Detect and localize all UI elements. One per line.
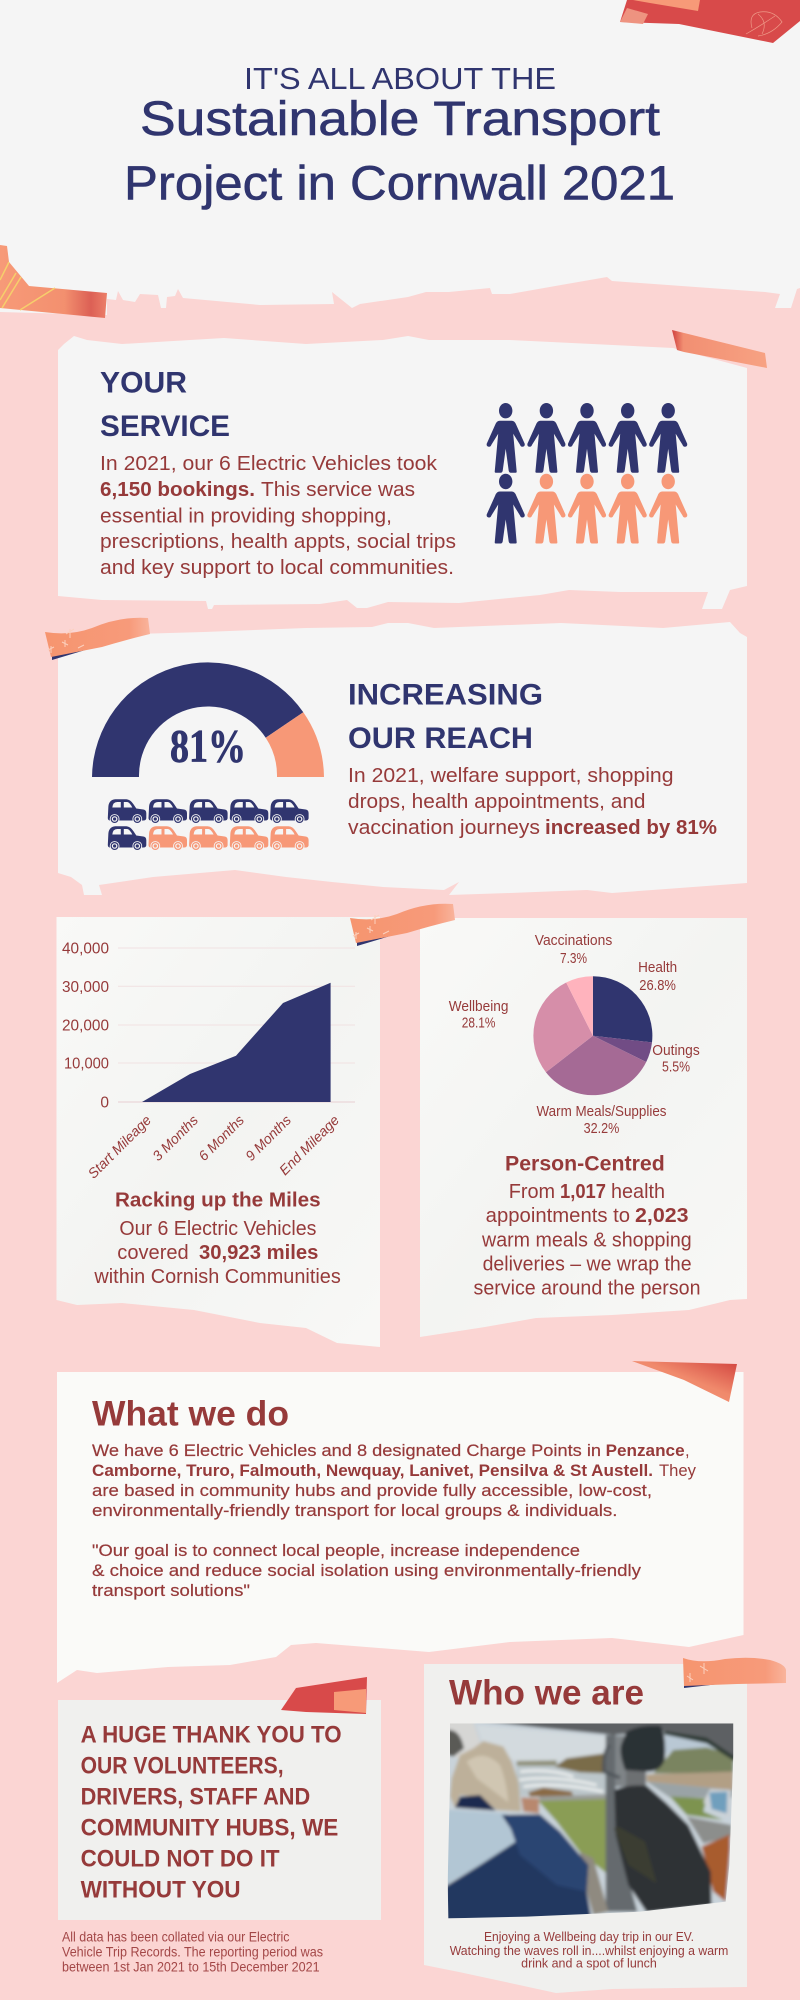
text block: bookings [100, 453, 456, 579]
text block: thank you message: A HUGE THANK YOU TO [81, 1722, 342, 1749]
icon: ten people pictogram [487, 403, 687, 544]
text block: bookings: In 2021, our 6 Electric Vehicles took [100, 453, 438, 475]
caption: photo: drink and a spot of lunch [521, 1956, 657, 1971]
text block: reach: In 2021, welfare support, shopping [348, 765, 674, 787]
text block: miles: covered [117, 1242, 189, 1264]
heading: your service: YOUR [100, 366, 187, 400]
heading: what we do: What we do [92, 1395, 289, 1434]
y axis labels: 30,000 [62, 979, 109, 996]
text block: thank you message: OUR VOLUNTEERS, [81, 1752, 284, 1779]
x axis labels: 9 Months [242, 1112, 294, 1164]
panel: who we are [424, 1664, 747, 1993]
panel: racking up the miles [56, 917, 380, 1347]
pie labels [449, 932, 700, 1137]
text block: charge points: Penzance [606, 1442, 685, 1460]
text block: person-centred: health [611, 1181, 665, 1203]
x axis labels: End Mileage [276, 1112, 342, 1178]
panel: what we do [57, 1372, 744, 1683]
pie labels: Wellbeing [449, 998, 508, 1015]
pie labels: 7.3% [560, 950, 587, 967]
title: eyebrow: IT'S ALL ABOUT THE [244, 61, 556, 96]
y axis labels: 40,000 [62, 940, 109, 958]
text block: thank you message [81, 1722, 342, 1903]
text block: charge points: environmentally-friendly transport for local groups & individuals. [92, 1502, 618, 1520]
caption: photo: Enjoying a Wellbeing day trip in our EV. [484, 1929, 694, 1944]
x axis labels [84, 1112, 342, 1181]
title: main line one: Sustainable Transport [140, 93, 660, 146]
area series [142, 983, 331, 1102]
text block: person-centred: service around the person [474, 1278, 700, 1300]
text block: reach [348, 765, 717, 839]
chart: journey purpose pie [449, 932, 700, 1137]
text block: bookings: and key support to local communities. [100, 557, 454, 579]
text block: reach: vaccination journeys [348, 817, 540, 839]
text block: bookings: 6,150 bookings. [100, 479, 255, 501]
panel: header [0, 0, 800, 315]
text block: person-centred: 2,023 [635, 1205, 689, 1227]
text block: thank you message: DRIVERS, STAFF AND [81, 1784, 310, 1811]
pie labels: 5.5% [662, 1059, 690, 1076]
text block: data note: Vehicle Trip Records. The reporting period was [62, 1944, 323, 1960]
caption: photo [450, 1929, 728, 1971]
text block: charge points [92, 1442, 697, 1520]
text block: bookings: This service was [261, 479, 415, 501]
text block: thank you message: COULD NOT DO IT [81, 1846, 280, 1873]
heading: your service [100, 366, 230, 443]
y axis labels: 10,000 [64, 1056, 109, 1072]
title: main line two: Project in Cornwall 2021 [124, 158, 675, 211]
text block: miles [93, 1218, 341, 1288]
tape: left orange [0, 245, 107, 318]
text block: charge points: are based in community hubs and provide fully accessible, low-cost, [92, 1482, 652, 1500]
panel: person-centred [420, 918, 747, 1337]
x axis labels: Start Mileage [84, 1112, 154, 1181]
tape: top right red [620, 0, 800, 43]
text block: goal quote: "Our goal is to connect local people, increase independence [92, 1542, 580, 1560]
text block: person-centred: appointments to [486, 1205, 630, 1227]
text block: charge points: , [685, 1442, 690, 1460]
gauge value: 81% [170, 721, 246, 773]
tape: who we are panel [683, 1658, 786, 1688]
pie labels: 28.1% [462, 1015, 495, 1032]
text block: data note: All data has been collated via our Electric [62, 1929, 290, 1945]
pie labels: Health [638, 959, 677, 976]
y axis labels [62, 940, 109, 1112]
text block: charge points: We have 6 Electric Vehicles and 8 designated Charge Points in [92, 1442, 601, 1460]
heading: your service: SERVICE [100, 410, 230, 443]
heading: increasing our reach: OUR REACH [348, 722, 533, 755]
icon: ten cars pictogram [108, 799, 309, 851]
text block: goal quote: & choice and reduce social isolation using environmentally-friendly [92, 1562, 642, 1580]
text block: person-centred: From [509, 1181, 555, 1203]
text block: goal quote: transport solutions" [92, 1582, 250, 1600]
chart: mileage area chart [62, 940, 355, 1181]
text block: miles: Our 6 Electric Vehicles [119, 1218, 316, 1240]
tape: service panel [672, 330, 767, 368]
heading: increasing our reach [348, 678, 543, 755]
pie labels: Vaccinations [535, 932, 612, 949]
text block: person-centred: warm meals & shopping [481, 1230, 692, 1252]
y axis labels: 0 [100, 1094, 109, 1112]
heading: racking up the miles: Racking up the Miles [115, 1190, 321, 1212]
pie labels: Warm Meals/Supplies [536, 1103, 666, 1120]
tape: chart panels [350, 904, 455, 946]
tape: reach panel [45, 618, 150, 660]
pie labels: Outings [652, 1042, 700, 1059]
text block: charge points: Camborne, Truro, Falmouth, Newquay, Lanivet, Pensilva & St Austell. [92, 1462, 653, 1480]
photo: wellbeing trip view from the vehicle [448, 1723, 734, 1918]
text block: data note [62, 1929, 323, 1975]
text block: bookings: essential in providing shopping, [100, 506, 392, 528]
text block: reach: drops, health appointments, and [348, 791, 646, 813]
heading: increasing our reach: INCREASING [348, 678, 543, 711]
text block: person-centred: 1,017 [560, 1181, 606, 1203]
tape: thank you panel red [281, 1677, 367, 1714]
pie labels: 32.2% [584, 1120, 619, 1137]
text block: person-centred [474, 1181, 700, 1300]
tape: what we do corner [632, 1361, 737, 1402]
chart: 81% gauge [92, 662, 324, 777]
text block: bookings: prescriptions, health appts, social trips [100, 531, 456, 553]
pie labels: 26.8% [639, 977, 676, 994]
text block: person-centred: deliveries – we wrap the [483, 1254, 692, 1276]
text block: thank you message: WITHOUT YOU [81, 1876, 241, 1903]
text block: miles: 30,923 miles [199, 1242, 318, 1264]
y axis labels: 20,000 [62, 1018, 109, 1034]
caption: photo: Watching the waves roll in....whilst enjoying a warm [450, 1943, 728, 1958]
text block: miles: within Cornish Communities [93, 1266, 341, 1288]
panel: your service [58, 336, 747, 609]
text block: charge points: They [659, 1462, 697, 1480]
heading: person-centred: Person-Centred [505, 1153, 665, 1176]
text block: reach: increased by 81% [545, 817, 717, 839]
panel: thank you [58, 1700, 381, 1920]
panel: increasing our reach [58, 622, 747, 895]
heading: who we are: Who we are [449, 1673, 644, 1712]
x axis labels: 3 Months [149, 1112, 201, 1164]
text block: data note: between 1st Jan 2021 to 15th December 2021 [62, 1959, 320, 1975]
text block: thank you message: COMMUNITY HUBS, WE [81, 1814, 338, 1841]
text block: goal quote [92, 1542, 642, 1600]
x axis labels: 6 Months [195, 1112, 247, 1164]
